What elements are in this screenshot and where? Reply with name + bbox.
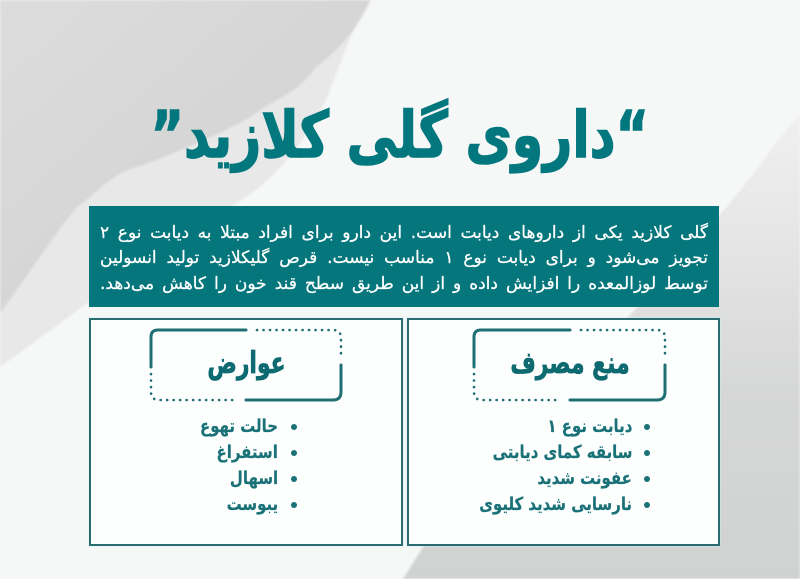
heading frame: contraindications [472, 328, 666, 402]
list: side effects: اسهال [230, 468, 278, 489]
intro text panel: گلی کلازید یکی از داروهای دیابت است. این دارو برای افراد مبتلا به دیابت نوع ۲ [100, 223, 708, 243]
heading: side effects: عوارض [207, 346, 286, 381]
list: side effects: حالت تهوع [200, 416, 278, 437]
list: side effects: یبوست [226, 494, 278, 515]
list: contraindications: عفونت شدید [537, 468, 632, 489]
list: contraindications: دیابت نوع ۱ [547, 416, 632, 437]
intro text panel [89, 206, 719, 307]
list: contraindications [479, 416, 650, 515]
list: side effects [200, 416, 297, 515]
panel: contraindications [407, 318, 720, 546]
list: contraindications: سابقه کمای دیابتی [492, 442, 632, 463]
list: side effects: استفراغ [217, 442, 278, 463]
list: contraindications: نارسایی شدید کلیوی [479, 494, 632, 515]
panel: side effects [89, 318, 403, 546]
intro text panel: توسط لوزالمعده را افزایش داده و از این طریق سطح قند خون را کاهش می‌دهد. [100, 274, 708, 294]
heading frame: side effects [150, 328, 342, 402]
heading: contraindications: منع مصرف [510, 346, 630, 381]
title: “داروی گلی کلازید” [151, 99, 649, 173]
intro text panel: تجویز می‌شود و برای دیابت نوع ۱ مناسب نیست. قرص گلیکلازید تولید انسولین [100, 248, 708, 268]
